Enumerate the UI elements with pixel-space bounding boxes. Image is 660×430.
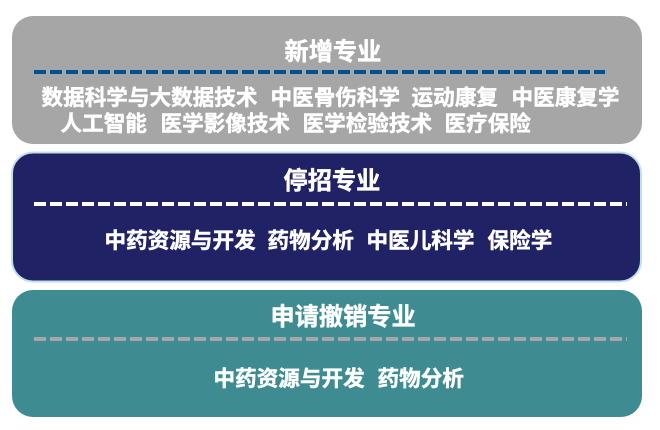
text: new majors line 1: 数据科学与大数据技术 — [42, 85, 258, 110]
text: new majors line 2: 人工智能 — [60, 111, 147, 136]
text: discontinued majors list: 中医儿科学 — [366, 228, 474, 253]
panel: discontinued majors — [12, 152, 641, 282]
text: new majors line 1: 中医骨伤科学 — [270, 85, 400, 110]
panel: majors applied for revocation — [12, 290, 642, 417]
text: majors applied for revocation list: 中药资源与开发 — [214, 366, 365, 391]
text: discontinued majors list: 保险学 — [488, 228, 552, 253]
text: new majors line 2: 医疗保险 — [444, 111, 531, 136]
text: new majors line 2: 医学检验技术 — [302, 111, 432, 136]
heading: new majors: 新增专业 — [284, 39, 381, 66]
panel: new majors — [12, 16, 642, 144]
heading: discontinued majors: 停招专业 — [284, 168, 380, 195]
text: majors applied for revocation list: 药物分析 — [378, 366, 464, 391]
text: new majors line 1: 中医康复学 — [512, 85, 619, 110]
text: new majors line 2: 医学影像技术 — [160, 111, 290, 136]
text: discontinued majors list: 药物分析 — [268, 228, 354, 253]
text: new majors line 1: 运动康复 — [412, 85, 498, 110]
text: discontinued majors list: 中药资源与开发 — [104, 228, 256, 253]
heading: majors applied for revocation: 申请撤销专业 — [270, 304, 416, 331]
